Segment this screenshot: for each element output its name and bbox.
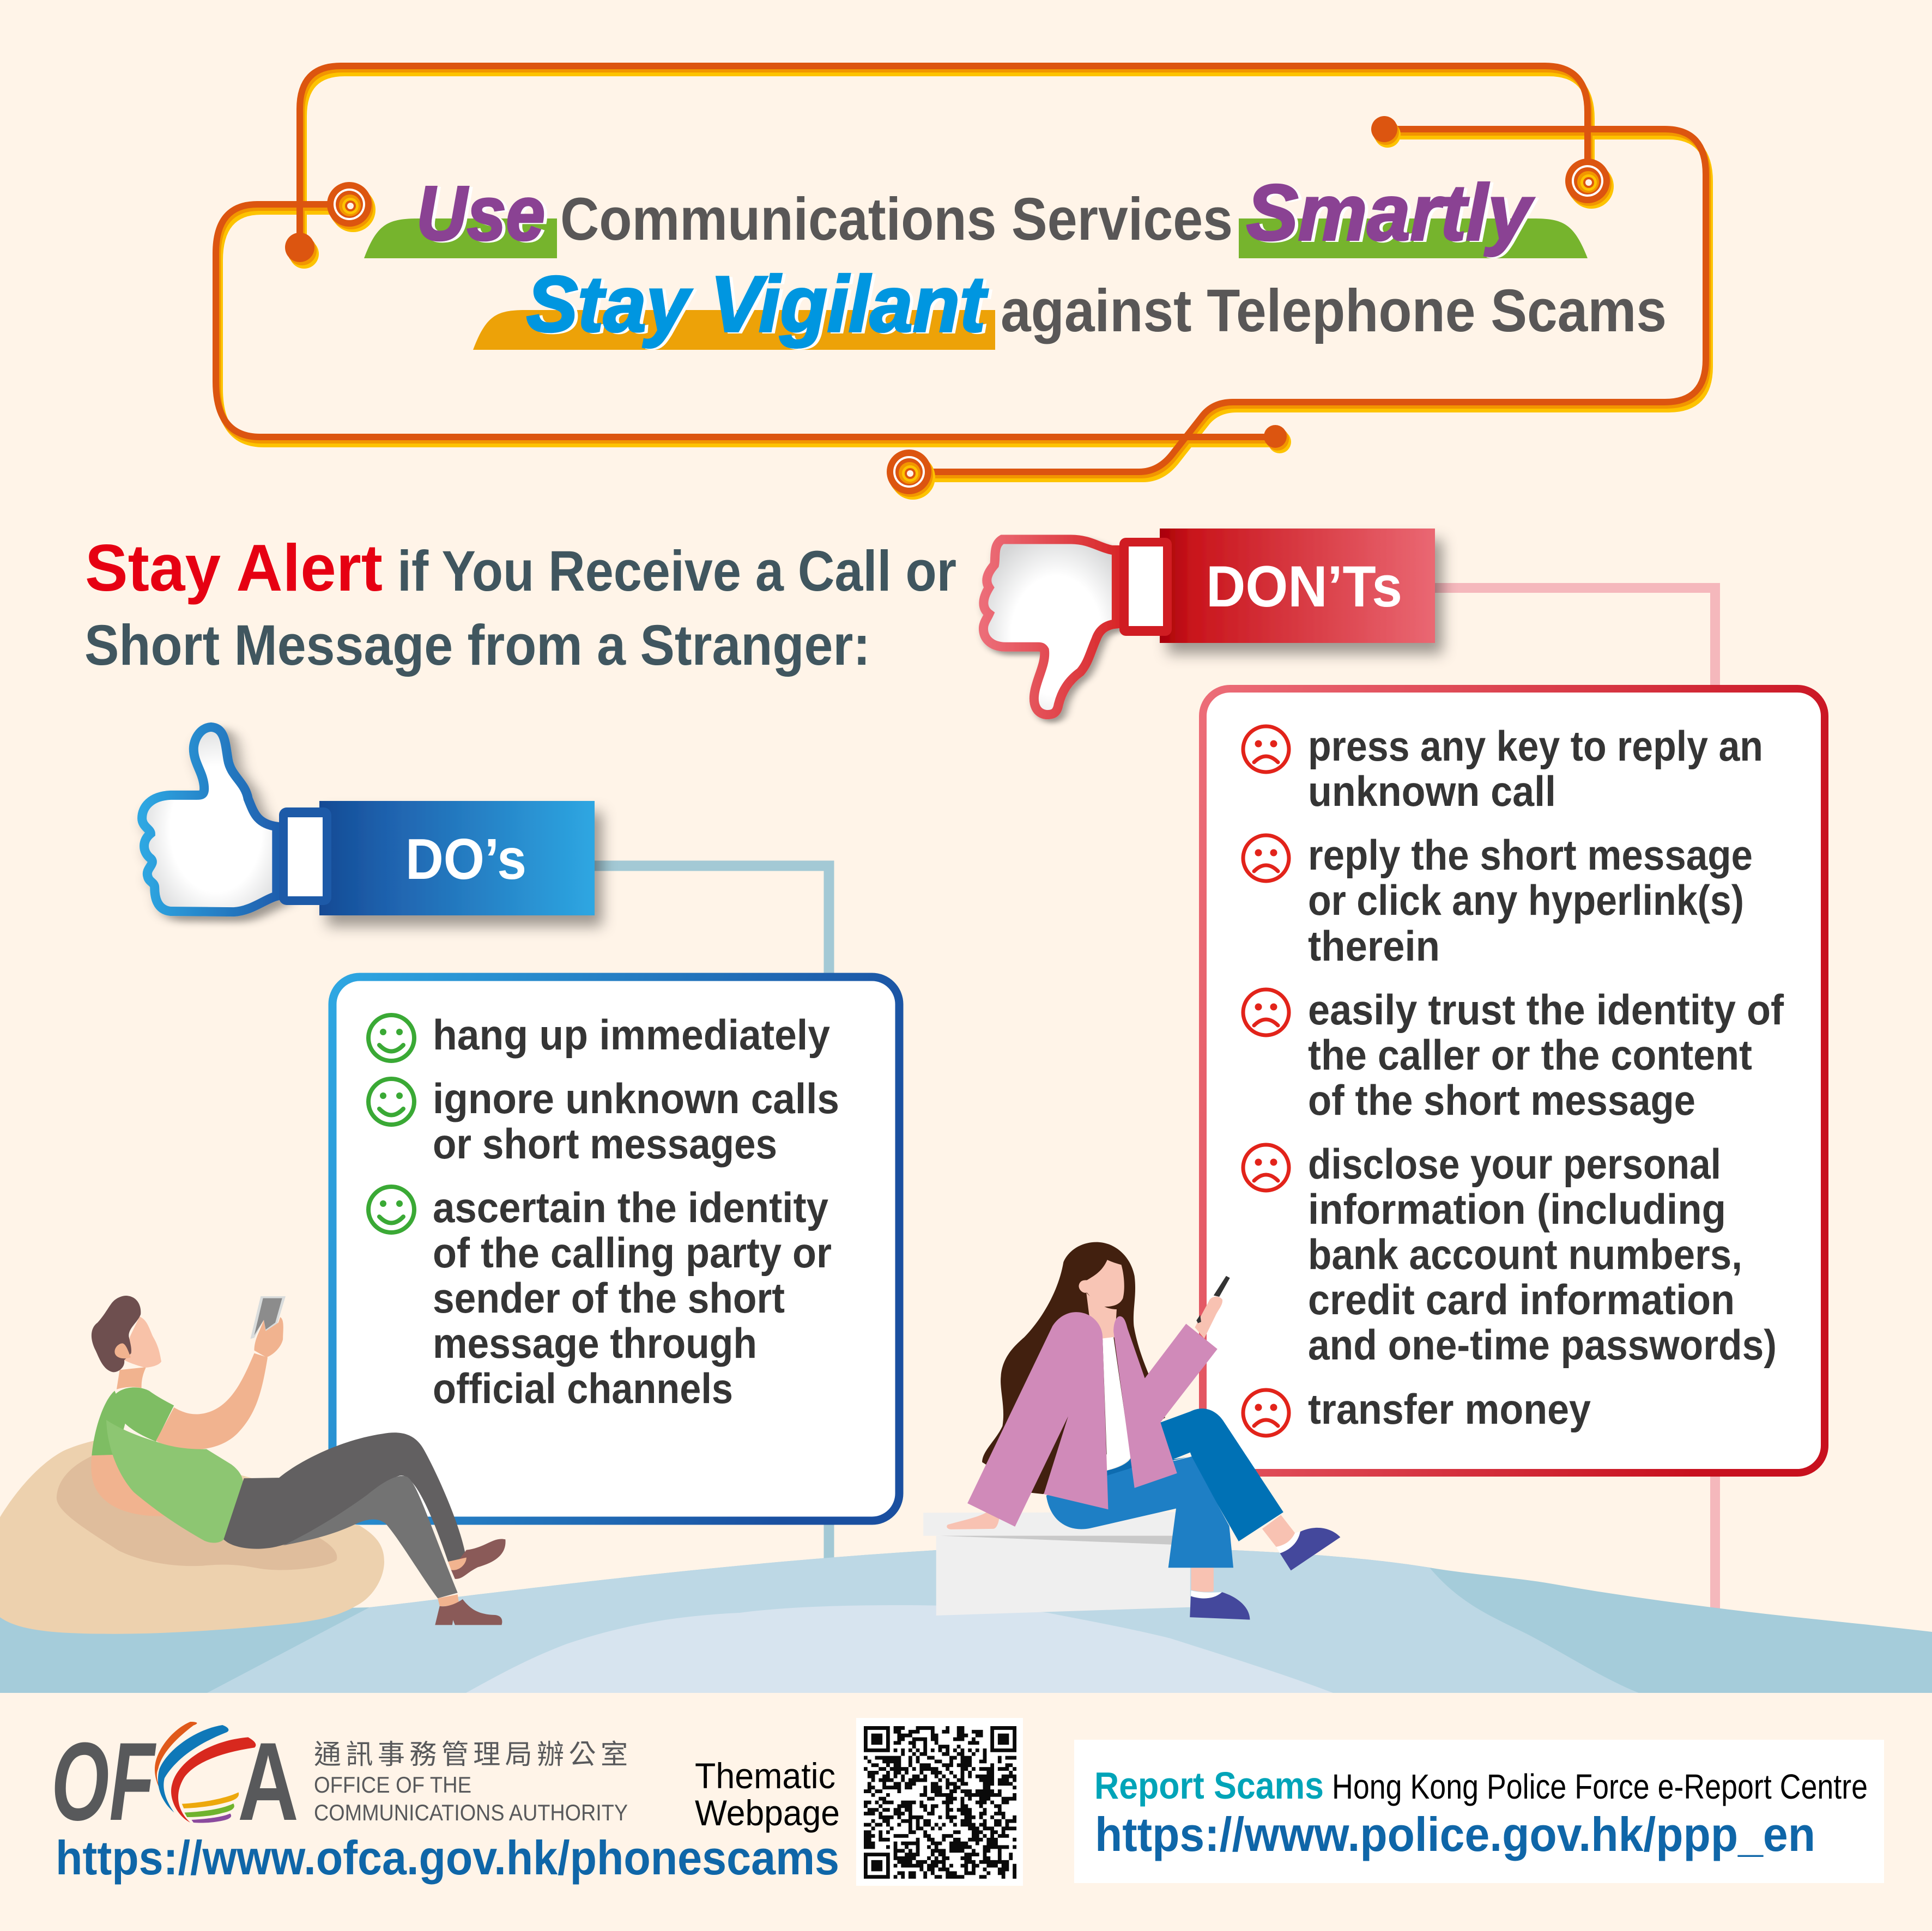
don'ts list text: therein <box>1308 922 1440 970</box>
title line 1: Smartly <box>1246 168 1534 257</box>
do's list text: sender of the short <box>433 1274 785 1322</box>
do's list text: official channels <box>433 1364 733 1412</box>
don'ts list text: press any key to reply an <box>1308 722 1763 770</box>
panel: don'ts <box>1203 689 1825 1473</box>
footer: OFCA url: https://www.ofca.gov.hk/phonescams <box>56 1831 839 1885</box>
title line 1: Use <box>416 170 545 256</box>
illustration: woman on block <box>923 1242 1340 1620</box>
don'ts list text: unknown call <box>1308 767 1556 815</box>
footer: report scams box: https://www.police.gov.hk/ppp_en <box>1095 1807 1815 1861</box>
title line 1: Communications Services <box>560 186 1233 253</box>
do's list text: or short messages <box>433 1120 777 1168</box>
woman's figure <box>947 1242 1340 1620</box>
don'ts list text: disclose your personal <box>1308 1140 1721 1188</box>
don'ts list text: reply the short message <box>1308 831 1753 879</box>
heading: stay alert: Short Message from a Stranger: <box>84 614 870 677</box>
title line 1 <box>416 168 1534 257</box>
title line 2 <box>526 260 1667 348</box>
panel: do's <box>332 977 899 1521</box>
ground hills <box>0 1550 1932 1693</box>
do's list text: of the calling party or <box>433 1229 832 1277</box>
don'ts list text: and one-time passwords) <box>1308 1321 1777 1369</box>
icon: sad 4 <box>1243 1145 1289 1191</box>
don'ts list text: easily trust the identity of <box>1308 986 1784 1034</box>
footer: thematic webpage label: Thematic <box>695 1756 835 1796</box>
footer: OFCA logo <box>51 1720 299 1844</box>
thumbs up icon <box>142 727 277 912</box>
man's figure <box>91 1296 506 1625</box>
banner: don'ts: DON’Ts <box>1206 554 1402 619</box>
circuit target: bottom <box>887 450 935 500</box>
footer: office name: COMMUNICATIONS AUTHORITY <box>314 1800 628 1825</box>
icon: sad 3 <box>1243 989 1289 1035</box>
footer: report scams box <box>1074 1740 1884 1883</box>
beanbag shade <box>57 1456 337 1570</box>
title frame: circuit lines <box>216 66 1710 479</box>
footer: thematic webpage label: Webpage <box>695 1793 840 1833</box>
banner: do's: DO’s <box>405 827 526 891</box>
title highlight: green right <box>1239 218 1588 258</box>
footer: office name <box>314 1739 628 1825</box>
title line 2: against Telephone Scams <box>1001 277 1667 344</box>
heading: stay alert <box>84 531 956 677</box>
heading: stay alert: Stay Alert <box>85 531 383 605</box>
do's list text: ascertain the identity <box>433 1183 828 1231</box>
banner: don'ts <box>1119 529 1435 643</box>
footer: office name: 通訊事務管理局辦公室 <box>314 1739 628 1770</box>
don'ts list text <box>1308 722 1784 1433</box>
don'ts list text: the caller or the content <box>1308 1031 1752 1079</box>
icon: sad 1 <box>1243 726 1289 772</box>
don'ts list text: transfer money <box>1308 1385 1591 1433</box>
do's list text <box>433 1011 839 1412</box>
title highlight: amber <box>473 310 995 350</box>
icon: smile 1 <box>368 1015 414 1061</box>
QR code <box>856 1718 1023 1886</box>
icon: sad 2 <box>1243 835 1289 881</box>
stone block <box>923 1512 1190 1616</box>
do's list text: hang up immediately <box>433 1011 830 1059</box>
connector: don'ts <box>1435 588 1715 1629</box>
icon: smile 3 <box>368 1187 414 1232</box>
icon: sad 5 <box>1243 1390 1289 1436</box>
don'ts list text: of the short message <box>1308 1076 1695 1124</box>
don'ts list text: information (including <box>1308 1185 1726 1233</box>
thumbs down icon <box>983 539 1116 715</box>
connector: do's <box>595 866 829 1580</box>
title highlight: green left <box>364 218 557 258</box>
illustration: man on beanbag <box>0 1296 506 1634</box>
do's list text: ignore unknown calls <box>433 1074 839 1122</box>
footer: report scams box: Report Scams <box>1094 1764 1324 1807</box>
icon: smile 2 <box>368 1079 414 1125</box>
banner: do's <box>279 801 595 915</box>
title line 2: Stay Vigilant <box>526 260 989 348</box>
do's list text: message through <box>433 1319 757 1367</box>
logo swooshes <box>155 1722 256 1823</box>
beanbag <box>0 1438 384 1634</box>
circuit target: left <box>327 182 376 232</box>
footer: thematic webpage label <box>695 1756 840 1833</box>
circuit target: right <box>1565 159 1614 209</box>
heading: stay alert: if You Receive a Call or <box>397 539 956 603</box>
footer: OFCA logo: OF <box>51 1720 156 1844</box>
don'ts list text: or click any hyperlink(s) <box>1308 876 1744 924</box>
don'ts list text: bank account numbers, <box>1308 1230 1742 1278</box>
footer: office name: OFFICE OF THE <box>314 1772 471 1798</box>
footer: OFCA logo: A <box>238 1720 299 1844</box>
circuit end dots <box>285 116 1401 453</box>
don'ts list text: credit card information <box>1308 1276 1735 1323</box>
